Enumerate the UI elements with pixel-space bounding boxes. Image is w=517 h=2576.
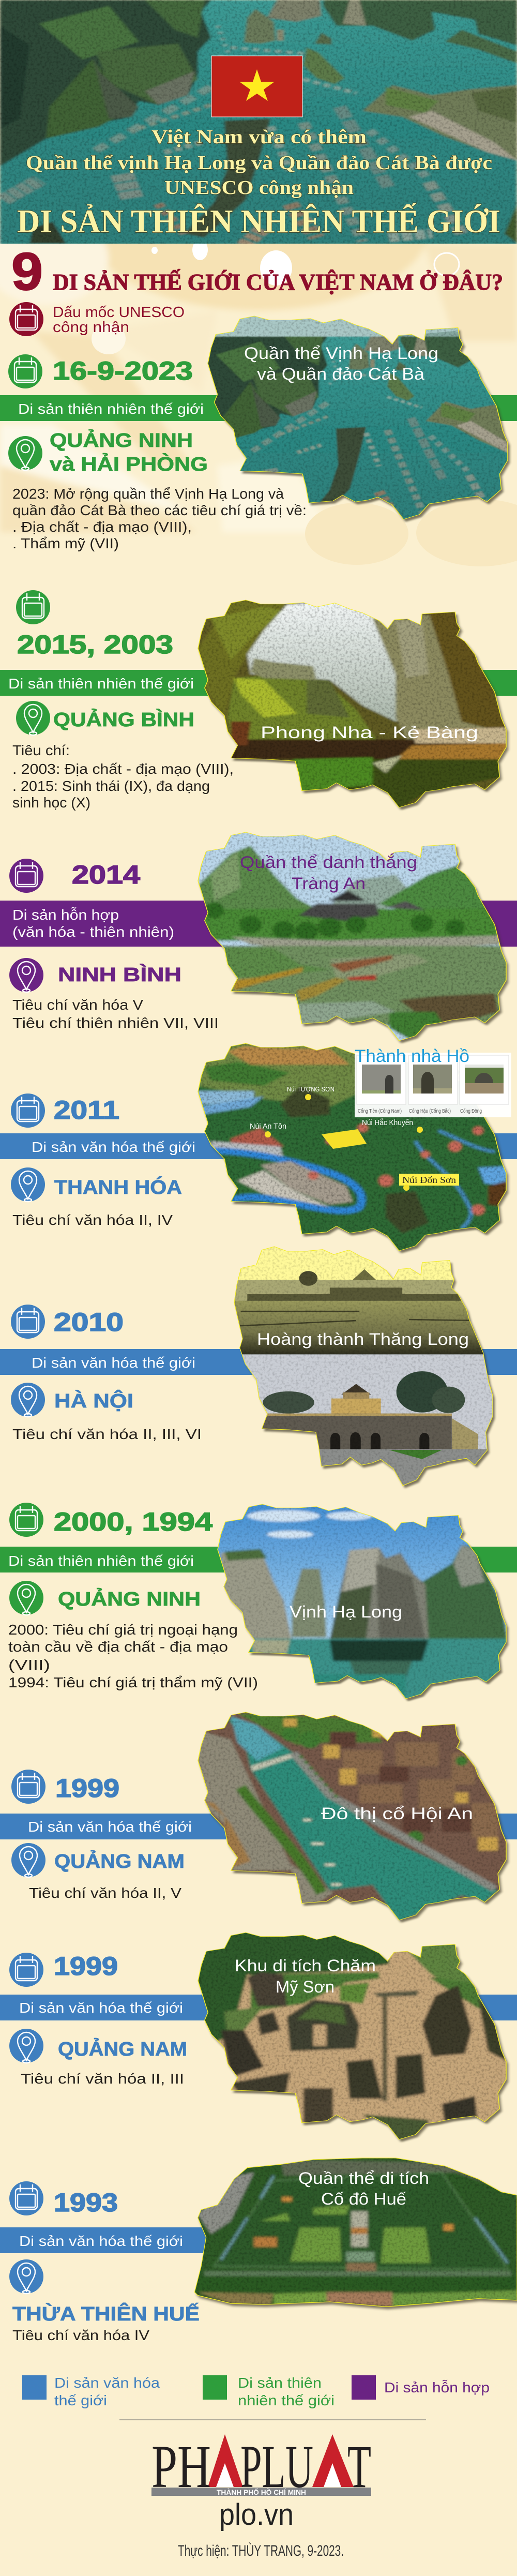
panel: site 5 text: HÀ NỘI — [54, 1389, 133, 1412]
map: Vịnh Hạ Long — [215, 1500, 511, 1702]
panel: site 6 text — [8, 1503, 258, 1690]
map: Thành nhà Hồ: Núi Hắc Khuyển — [362, 1118, 413, 1127]
legend: Di sản hỗn hợp — [384, 2379, 490, 2395]
panel: site 1 text: QUẢNG NINH — [50, 429, 193, 452]
inset: gate photos: Cổng Hậu (Cổng Bắc) — [409, 1107, 451, 1114]
panel: site 6 text: toàn cầu về địa chất - địa mạo — [8, 1639, 228, 1655]
map: Phong Nha - Kẻ Bàng: Phong Nha - Kẻ Bàng — [261, 723, 478, 742]
panel: site 3 text: Tiêu chí thiên nhiên VII, VIII — [12, 1015, 219, 1031]
legend note: UNESCO milestone — [9, 302, 185, 336]
panel: site 4 text: Tiêu chí văn hóa II, IV — [12, 1212, 173, 1228]
credit: Thực hiện: THÙY TRANG, 9-2023. — [178, 2542, 344, 2559]
map: Quần thể di tích Cố đô Huế — [191, 2155, 517, 2310]
map: Phong Nha - Kẻ Bàng — [194, 597, 511, 811]
map: Khu di tích Chăm Mỹ Sơn: Khu di tích Chăm — [235, 1956, 376, 1975]
logo: Pháp Luật: T — [347, 2433, 371, 2500]
panel: site 2 text: QUẢNG BÌNH — [53, 708, 194, 731]
panel: site 3 text: (văn hóa - thiên nhiên) — [12, 924, 174, 940]
panel: site 7 text: Tiêu chí văn hóa II, V — [29, 1885, 181, 1901]
panel: site 6 text: 1994: Tiêu chí giá trị thẩm mỹ (VII) — [8, 1674, 258, 1690]
panel: site 4 text — [11, 1094, 195, 1228]
panel: site 2 text: . 2003: Địa chất - địa mạo (VIII), — [12, 761, 234, 777]
map: Đô thị cổ Hội An: Đô thị cổ Hội An — [321, 1804, 473, 1823]
panel: site 5 text: Di sản văn hóa thế giới — [32, 1355, 195, 1371]
map: Quần thể danh thắng Tràng An: Tràng An — [292, 874, 366, 893]
map: Quần thể di tích Cố đô Huế: Quần thể di tích — [298, 2169, 429, 2188]
map: Thành nhà Hồ — [194, 1038, 511, 1255]
panel: site 1 text: . Thẩm mỹ (VII) — [12, 535, 119, 551]
title: DI SẢN THIÊN NHIÊN THẾ GIỚI — [17, 203, 500, 239]
heading: 9 heritage sites: DI SẢN THẾ GIỚI CỦA VIỆT NAM Ở ĐÂU? — [53, 269, 503, 295]
map: Quần thể Vịnh Hạ Long và Quần đảo Cát Bà: Quần thể Vịnh Hạ Long — [244, 344, 438, 363]
band: site 2 — [0, 670, 517, 696]
map: Thành nhà Hồ: Núi An Tôn — [250, 1122, 286, 1131]
panel: site 7 text: 1999 — [55, 1774, 119, 1803]
panel: site 9 text: 1993 — [54, 2188, 118, 2217]
heading: 9 heritage sites — [11, 242, 503, 301]
panel: site 1 text: và HẢI PHÒNG — [50, 453, 208, 475]
band: site 1 — [0, 395, 517, 421]
panel: site 3 text: Di sản hỗn hợp — [12, 907, 119, 923]
panel: site 7 text: QUẢNG NAM — [54, 1850, 185, 1873]
panel: site 1 text: . Địa chất - địa mạo (VIII), — [12, 519, 192, 535]
panel: site 2 text: Tiêu chí: — [12, 742, 70, 758]
panel: site 5 text — [11, 1305, 202, 1442]
panel: site 1 text: Di sản thiên nhiên thế giới — [18, 401, 204, 417]
panel: site 7 text: Di sản văn hóa thế giới — [28, 1819, 192, 1835]
legend: Di sản văn hóa — [54, 2375, 160, 2391]
map: Quần thể di tích Cố đô Huế: Cố đô Huế — [321, 2190, 406, 2208]
heading: 9 heritage sites: 9 — [11, 242, 43, 301]
inset: gate photos — [355, 1046, 511, 1117]
panel: site 9 text: Tiêu chí văn hóa IV — [12, 2327, 149, 2343]
inset: gate photos: Thành nhà Hồ — [355, 1046, 469, 1066]
panel: site 1 text: quần đảo Cát Bà theo các tiêu chí giá trị về: — [12, 502, 307, 518]
map: Quần thể danh thắng Tràng An: Quần thể danh thắng — [240, 853, 417, 872]
panel: site 8 text: Tiêu chí văn hóa II, III — [21, 2071, 184, 2087]
hero photo: Ha Long bay aerial — [0, 0, 517, 246]
panel: site 4 text: 2011 — [54, 1096, 119, 1125]
map: Thành nhà Hồ: Núi Đốn Sơn — [402, 1175, 456, 1185]
inset: gate photos: Cổng Đông — [460, 1108, 482, 1114]
inset: gate photos: Cổng Tiền (Cổng Nam) — [358, 1108, 402, 1114]
band: site 9 — [0, 2227, 217, 2253]
panel: site 4 text: Di sản văn hóa thế giới — [32, 1139, 195, 1155]
icon: Vietnam flag — [211, 56, 302, 117]
site address: plo.vn — [219, 2498, 294, 2532]
map: Quần thể Vịnh Hạ Long và Quần đảo Cát Bà — [190, 313, 517, 523]
legend: Di sản thiên — [238, 2375, 322, 2391]
panel: site 9 text — [9, 2181, 200, 2343]
panel: site 3 text: NINH BÌNH — [58, 963, 181, 986]
panel: site 1 text — [8, 354, 307, 551]
logo: Pháp Luật — [151, 2433, 371, 2500]
band: site 4 — [0, 1133, 517, 1159]
panel: site 9 text: Di sản văn hóa thế giới — [19, 2233, 183, 2249]
panel: site 6 text: Di sản thiên nhiên thế giới — [8, 1553, 194, 1569]
panel: site 8 text: Di sản văn hóa thế giới — [19, 2000, 183, 2016]
legend note: UNESCO milestone: công nhận — [53, 319, 129, 336]
panel: site 3 text — [9, 859, 219, 1031]
panel: site 6 text: 2000: Tiêu chí giá trị ngoại hạng — [8, 1622, 238, 1638]
panel: site 7 text — [11, 1770, 192, 1901]
map: Quần thể Vịnh Hạ Long và Quần đảo Cát Bà: và Quần đảo Cát Bà — [257, 365, 424, 383]
panel: site 8 text: 1999 — [54, 1952, 118, 1981]
panel: site 2 text: 2015, 2003 — [17, 630, 173, 659]
map: Hoàng thành Thăng Long — [227, 1241, 498, 1494]
map: Khu di tích Chăm Mỹ Sơn: Mỹ Sơn — [276, 1978, 334, 1996]
band: site 6 — [0, 1547, 517, 1572]
panel: site 6 text: 2000, 1994 — [54, 1507, 212, 1536]
panel: site 2 text: Di sản thiên nhiên thế giới — [8, 676, 194, 692]
legend: nhiên thế giới — [238, 2392, 334, 2408]
band: site 3 — [0, 901, 517, 947]
band: site 8 — [0, 1995, 517, 2020]
panel: site 9 text: THỪA THIÊN HUẾ — [12, 2302, 200, 2325]
panel: site 2 text — [8, 590, 234, 811]
title: UNESCO công nhận — [164, 177, 354, 199]
panel: site 5 text: Tiêu chí văn hóa II, III, VI — [12, 1426, 202, 1442]
title — [17, 126, 500, 239]
map: Vịnh Hạ Long: Vịnh Hạ Long — [290, 1602, 402, 1621]
band: site 5 — [0, 1349, 517, 1375]
logo: Pháp Luật: THÀNH PHỐ HỒ CHÍ MINH — [217, 2488, 306, 2496]
panel: site 8 text: QUẢNG NAM — [58, 2038, 187, 2060]
logo: Pháp Luật: PLU — [240, 2433, 313, 2500]
panel: site 2 text: . 2015: Sinh thái (IX), đa dạng — [12, 778, 210, 794]
legend note: UNESCO milestone: Dấu mốc UNESCO — [53, 304, 185, 321]
map: Đô thị cổ Hội An — [194, 1708, 511, 1924]
legend: thế giới — [54, 2392, 107, 2408]
logo: Pháp Luật: PH — [151, 2433, 211, 2500]
legend — [22, 2375, 490, 2408]
hero grain — [0, 0, 517, 244]
title: Việt Nam vừa có thêm — [151, 126, 367, 148]
map: Khu di tích Chăm Mỹ Sơn — [194, 1930, 511, 2145]
panel: site 3 text: Tiêu chí văn hóa V — [12, 997, 143, 1013]
band: site 7 — [0, 1814, 517, 1839]
panel: site 8 text — [9, 1952, 187, 2087]
map: Thành nhà Hồ: Núi TƯỢNG SƠN — [287, 1085, 334, 1093]
panel: site 1 text: 2023: Mở rộng quần thể Vịnh Hạ Long và — [12, 486, 284, 502]
panel: site 3 text: 2014 — [72, 860, 140, 889]
panel: site 1 text: 16-9-2023 — [53, 356, 193, 385]
title: Quần thể vịnh Hạ Long và Quần đảo Cát Bà được — [26, 152, 492, 174]
panel: site 6 text: QUẢNG NINH — [58, 1587, 201, 1610]
map: Quần thể danh thắng Tràng An — [197, 832, 510, 1044]
panel: site 5 text: 2010 — [54, 1308, 124, 1337]
panel: site 2 text: sinh học (X) — [12, 795, 90, 811]
panel: site 6 text: (VIII) — [8, 1657, 50, 1673]
panel: site 4 text: THANH HÓA — [54, 1176, 182, 1199]
map: Hoàng thành Thăng Long: Hoàng thành Thăng Long — [257, 1330, 469, 1349]
